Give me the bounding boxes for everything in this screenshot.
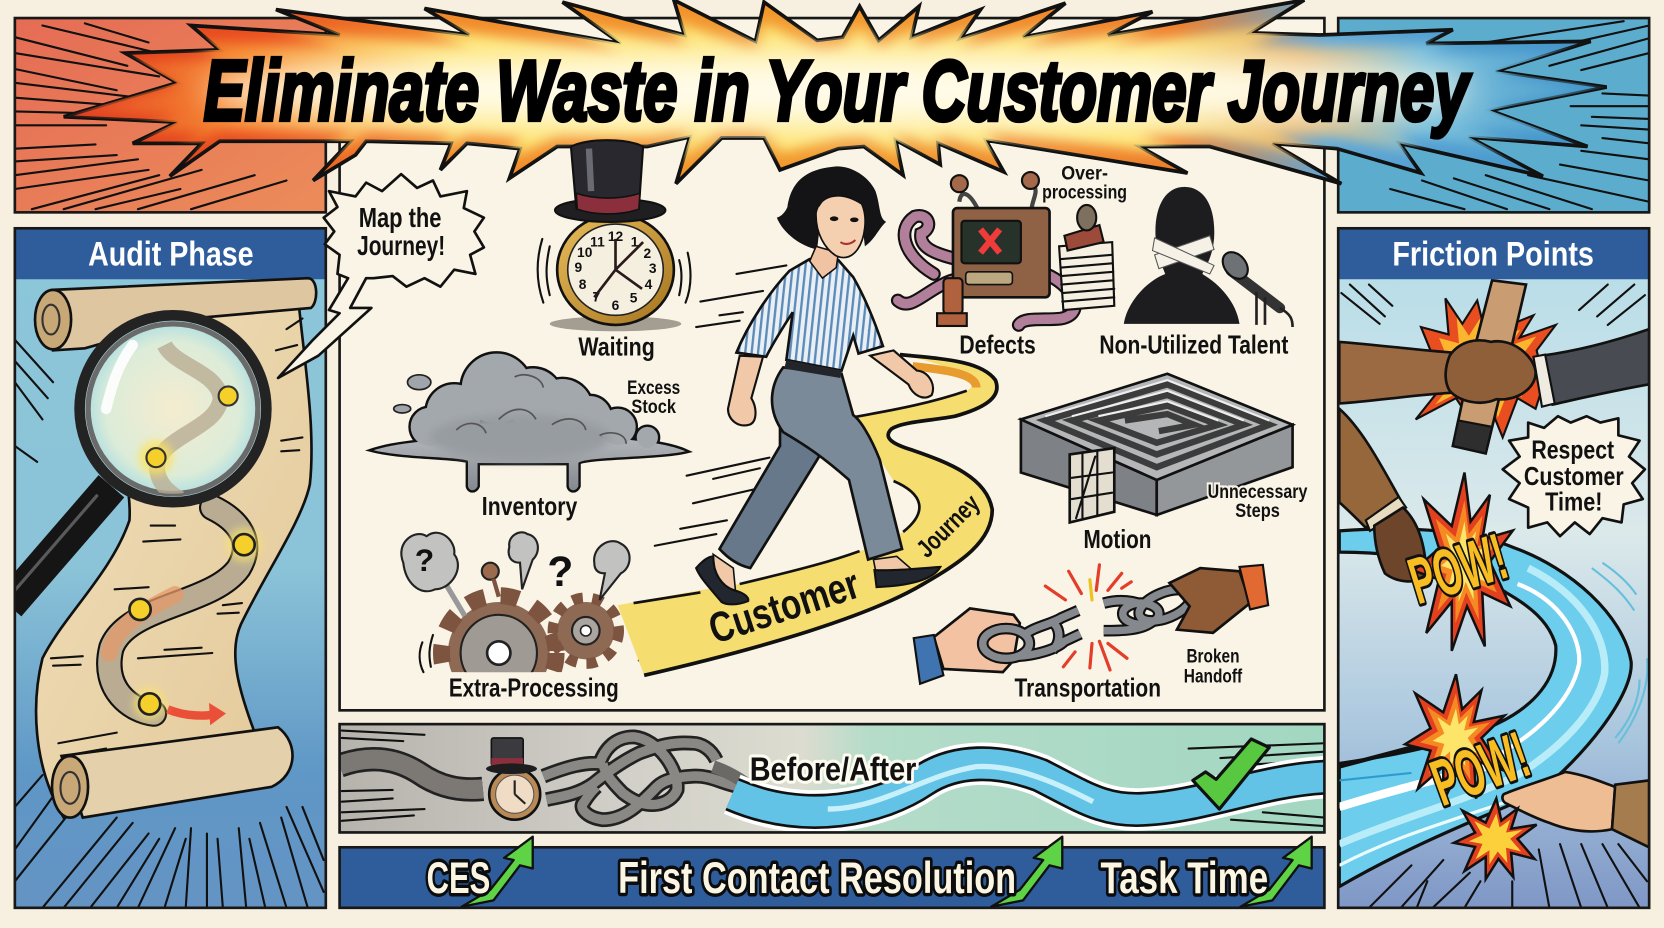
heading band: friction points: Friction Points xyxy=(1392,235,1594,273)
road label: journey: Journey xyxy=(911,489,986,563)
label: excess stock xyxy=(627,378,680,418)
label: transportation: Transportation xyxy=(1015,675,1161,703)
waste: inventory cloud xyxy=(374,354,686,490)
hips and front leg xyxy=(772,367,902,560)
label: broken handoff xyxy=(1184,647,1243,688)
waste: waiting clock: 8 xyxy=(579,277,587,292)
callout: respect customer time: Time! xyxy=(1545,489,1602,517)
label: non-utilized talent: Non-Utilized Talent xyxy=(1099,332,1289,360)
tangled knot xyxy=(543,737,764,820)
label: unnecessary steps: Unnecessary xyxy=(1208,482,1308,503)
character: woman walking xyxy=(655,166,940,604)
arms xyxy=(728,356,763,425)
waste: extra-processing gears xyxy=(400,531,639,674)
panel: KPI bar xyxy=(340,837,1324,908)
label: unnecessary steps xyxy=(1208,482,1308,522)
road label: customer: Customer xyxy=(703,560,865,653)
callout: map the journey xyxy=(278,174,484,378)
icon: magnifying glass xyxy=(8,315,266,605)
back leg xyxy=(720,414,838,568)
heading band: audit phase: Audit Phase xyxy=(88,235,254,273)
KPI: task time: Task Time xyxy=(1100,854,1268,903)
callout: map the journey: Map the xyxy=(359,202,441,233)
icon: green check mark xyxy=(1193,739,1269,809)
KPI: CES: CES xyxy=(427,854,490,903)
waste: non-utilized talent silhouette xyxy=(1124,187,1293,327)
label: over-processing xyxy=(1042,163,1127,204)
hair xyxy=(777,166,886,250)
flowing river xyxy=(732,764,1324,811)
front foot xyxy=(873,556,913,570)
waste: waiting clock: 1 xyxy=(631,234,639,249)
label: defects: Defects xyxy=(959,332,1036,360)
waste: waiting clock: 12 xyxy=(608,229,624,244)
waste: waiting clock: 11 xyxy=(590,234,605,249)
icon: small clock with hat xyxy=(486,738,540,820)
sparks xyxy=(1045,565,1131,670)
waste: waiting clock xyxy=(538,140,691,331)
label: inventory: Inventory xyxy=(482,493,578,521)
arrow: task time up xyxy=(1241,837,1312,907)
panel: centre waste map xyxy=(340,18,1324,710)
waste: waiting clock: 2 xyxy=(644,246,652,261)
label: excess stock: Stock xyxy=(631,397,676,418)
callout: pow burst two xyxy=(1405,674,1538,820)
road: customer journey path xyxy=(618,355,997,675)
paper stack xyxy=(1059,205,1114,310)
panel: friction points xyxy=(1338,228,1649,908)
back foot xyxy=(713,554,735,590)
label: extra-processing: Extra-Processing xyxy=(449,675,619,703)
KPI: first contact resolution: First Contact Resolution xyxy=(618,854,1016,903)
worn road xyxy=(340,759,483,789)
arrow: first contact resolution up xyxy=(991,837,1062,907)
icon: impact burst at baton xyxy=(1416,298,1556,437)
icon: water stream flow xyxy=(1339,529,1647,887)
panel border: top-left xyxy=(15,18,326,212)
shirt xyxy=(736,259,883,371)
label: broken handoff: Broken xyxy=(1186,647,1240,668)
label: before/after: Before/After xyxy=(750,750,917,787)
waste: broken chain transportation xyxy=(914,565,1268,684)
panel: top-left red action panel xyxy=(15,18,326,212)
left hand xyxy=(934,608,1020,672)
icon: lower hand gripping stream xyxy=(1502,772,1649,847)
belt xyxy=(784,360,842,378)
heading band: friction points xyxy=(1338,228,1649,279)
waste: waiting clock: 10 xyxy=(577,245,593,260)
waste: extra-processing gears: ? xyxy=(547,548,573,595)
callout: respect customer time: Respect xyxy=(1531,437,1615,465)
callout: map the journey: Journey! xyxy=(357,230,445,261)
label: broken handoff: Handoff xyxy=(1184,667,1243,688)
waste: extra-processing gears: ? xyxy=(415,542,434,578)
microphone xyxy=(1218,247,1293,327)
panel border: top-right xyxy=(1338,18,1649,212)
label: excess stock: Excess xyxy=(627,378,680,399)
door xyxy=(1070,448,1114,522)
neck and collar xyxy=(810,246,838,278)
face xyxy=(816,196,865,258)
callout: pow burst one: POW! xyxy=(1400,519,1515,618)
icon: upper arms handing over baton xyxy=(1339,280,1649,453)
right hand xyxy=(1169,568,1250,633)
callout: respect customer time: Customer xyxy=(1524,463,1624,491)
waste: waiting clock: 9 xyxy=(575,260,583,275)
panel: audit phase xyxy=(8,228,326,908)
waste: waiting clock: 5 xyxy=(630,291,638,306)
burst: title explosion xyxy=(64,0,1607,184)
waste: waiting clock: 7 xyxy=(593,290,601,305)
label: over-processing: Over- xyxy=(1061,163,1108,184)
heading band: audit phase xyxy=(15,228,326,279)
waste: waiting clock: 6 xyxy=(612,298,620,313)
label: unnecessary steps: Steps xyxy=(1235,501,1280,522)
waste: motion maze xyxy=(1021,374,1293,522)
waste: waiting clock: 3 xyxy=(649,261,657,276)
waste: defects robot xyxy=(898,172,1114,326)
arrow: CES up xyxy=(462,837,533,907)
callout: pow burst one xyxy=(1400,472,1515,651)
panel: top-right blue action panel xyxy=(1338,18,1649,212)
waste: waiting clock: 4 xyxy=(645,277,653,292)
label: motion: Motion xyxy=(1084,526,1151,554)
callout: respect customer time xyxy=(1503,416,1645,536)
scroll top roller xyxy=(35,278,316,350)
scroll bottom roller xyxy=(52,727,293,818)
label: waiting: Waiting xyxy=(578,334,655,362)
callout: pow burst three xyxy=(1454,798,1537,879)
panel: before/after strip xyxy=(340,724,1324,832)
callout: pow burst two: POW! xyxy=(1421,717,1538,820)
chain links xyxy=(983,583,1196,658)
label: over-processing: processing xyxy=(1042,183,1127,204)
icon: lower brown arm xyxy=(1339,409,1426,581)
illustration: treasure map scroll xyxy=(8,278,316,818)
